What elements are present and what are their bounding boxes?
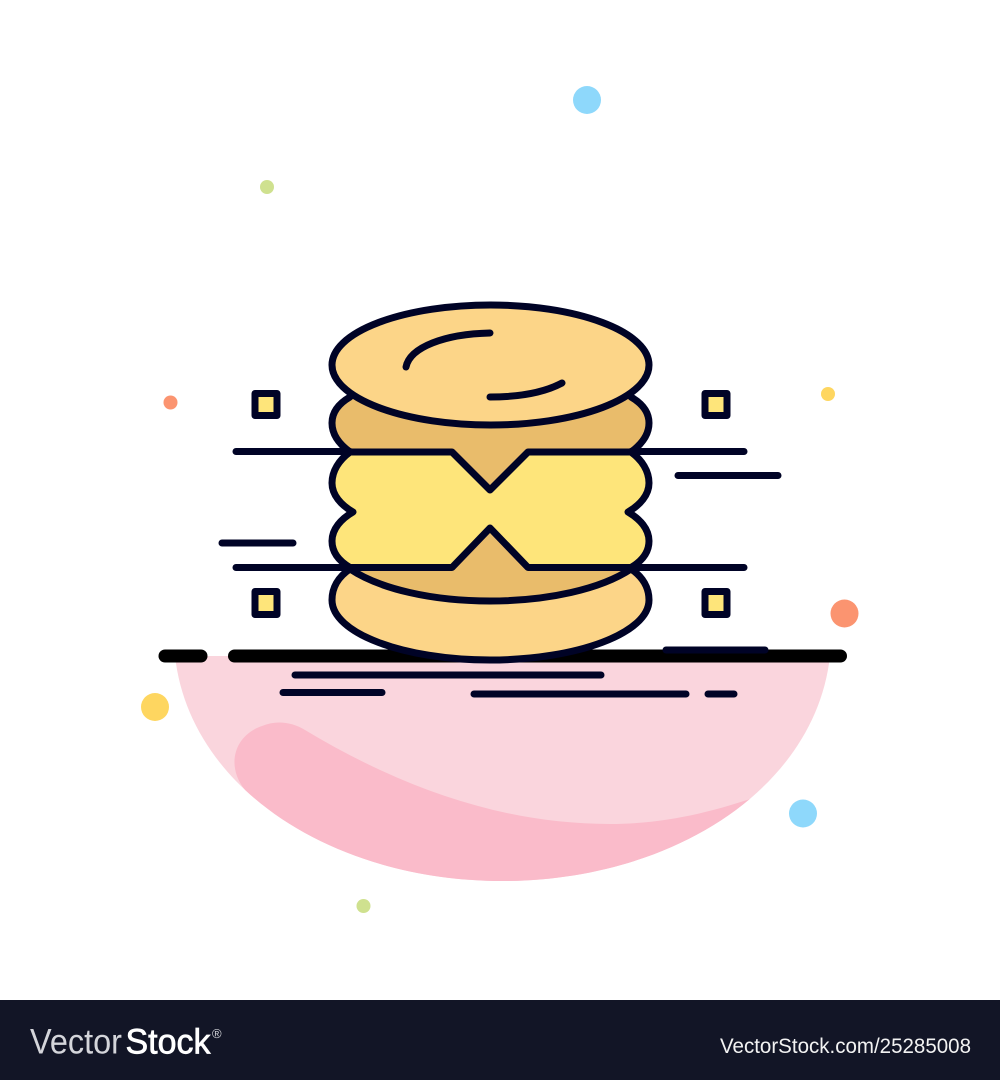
top bun highlights bbox=[406, 333, 490, 367]
middle layer bbox=[332, 452, 649, 568]
lower dark layer bbox=[350, 515, 631, 601]
decorative dots bbox=[141, 86, 858, 913]
footer logo: Stock bbox=[126, 1022, 211, 1062]
footer url: VectorStock.com/25285008 bbox=[720, 1035, 971, 1058]
upper dark layer bbox=[332, 397, 649, 500]
speed lines bbox=[222, 452, 778, 568]
ground line bbox=[158, 650, 847, 662]
square markers bbox=[255, 394, 277, 416]
database burger icon bbox=[222, 305, 778, 660]
footer bar bbox=[0, 1000, 1000, 1080]
footer logo: Vector bbox=[30, 1022, 122, 1062]
footer registered mark: ® bbox=[212, 1026, 222, 1041]
small lines under ground bbox=[283, 650, 765, 694]
pink bowl bbox=[175, 656, 830, 900]
top bun bbox=[332, 305, 649, 425]
footer logo bbox=[30, 1022, 211, 1062]
bottom bun bbox=[332, 569, 649, 660]
